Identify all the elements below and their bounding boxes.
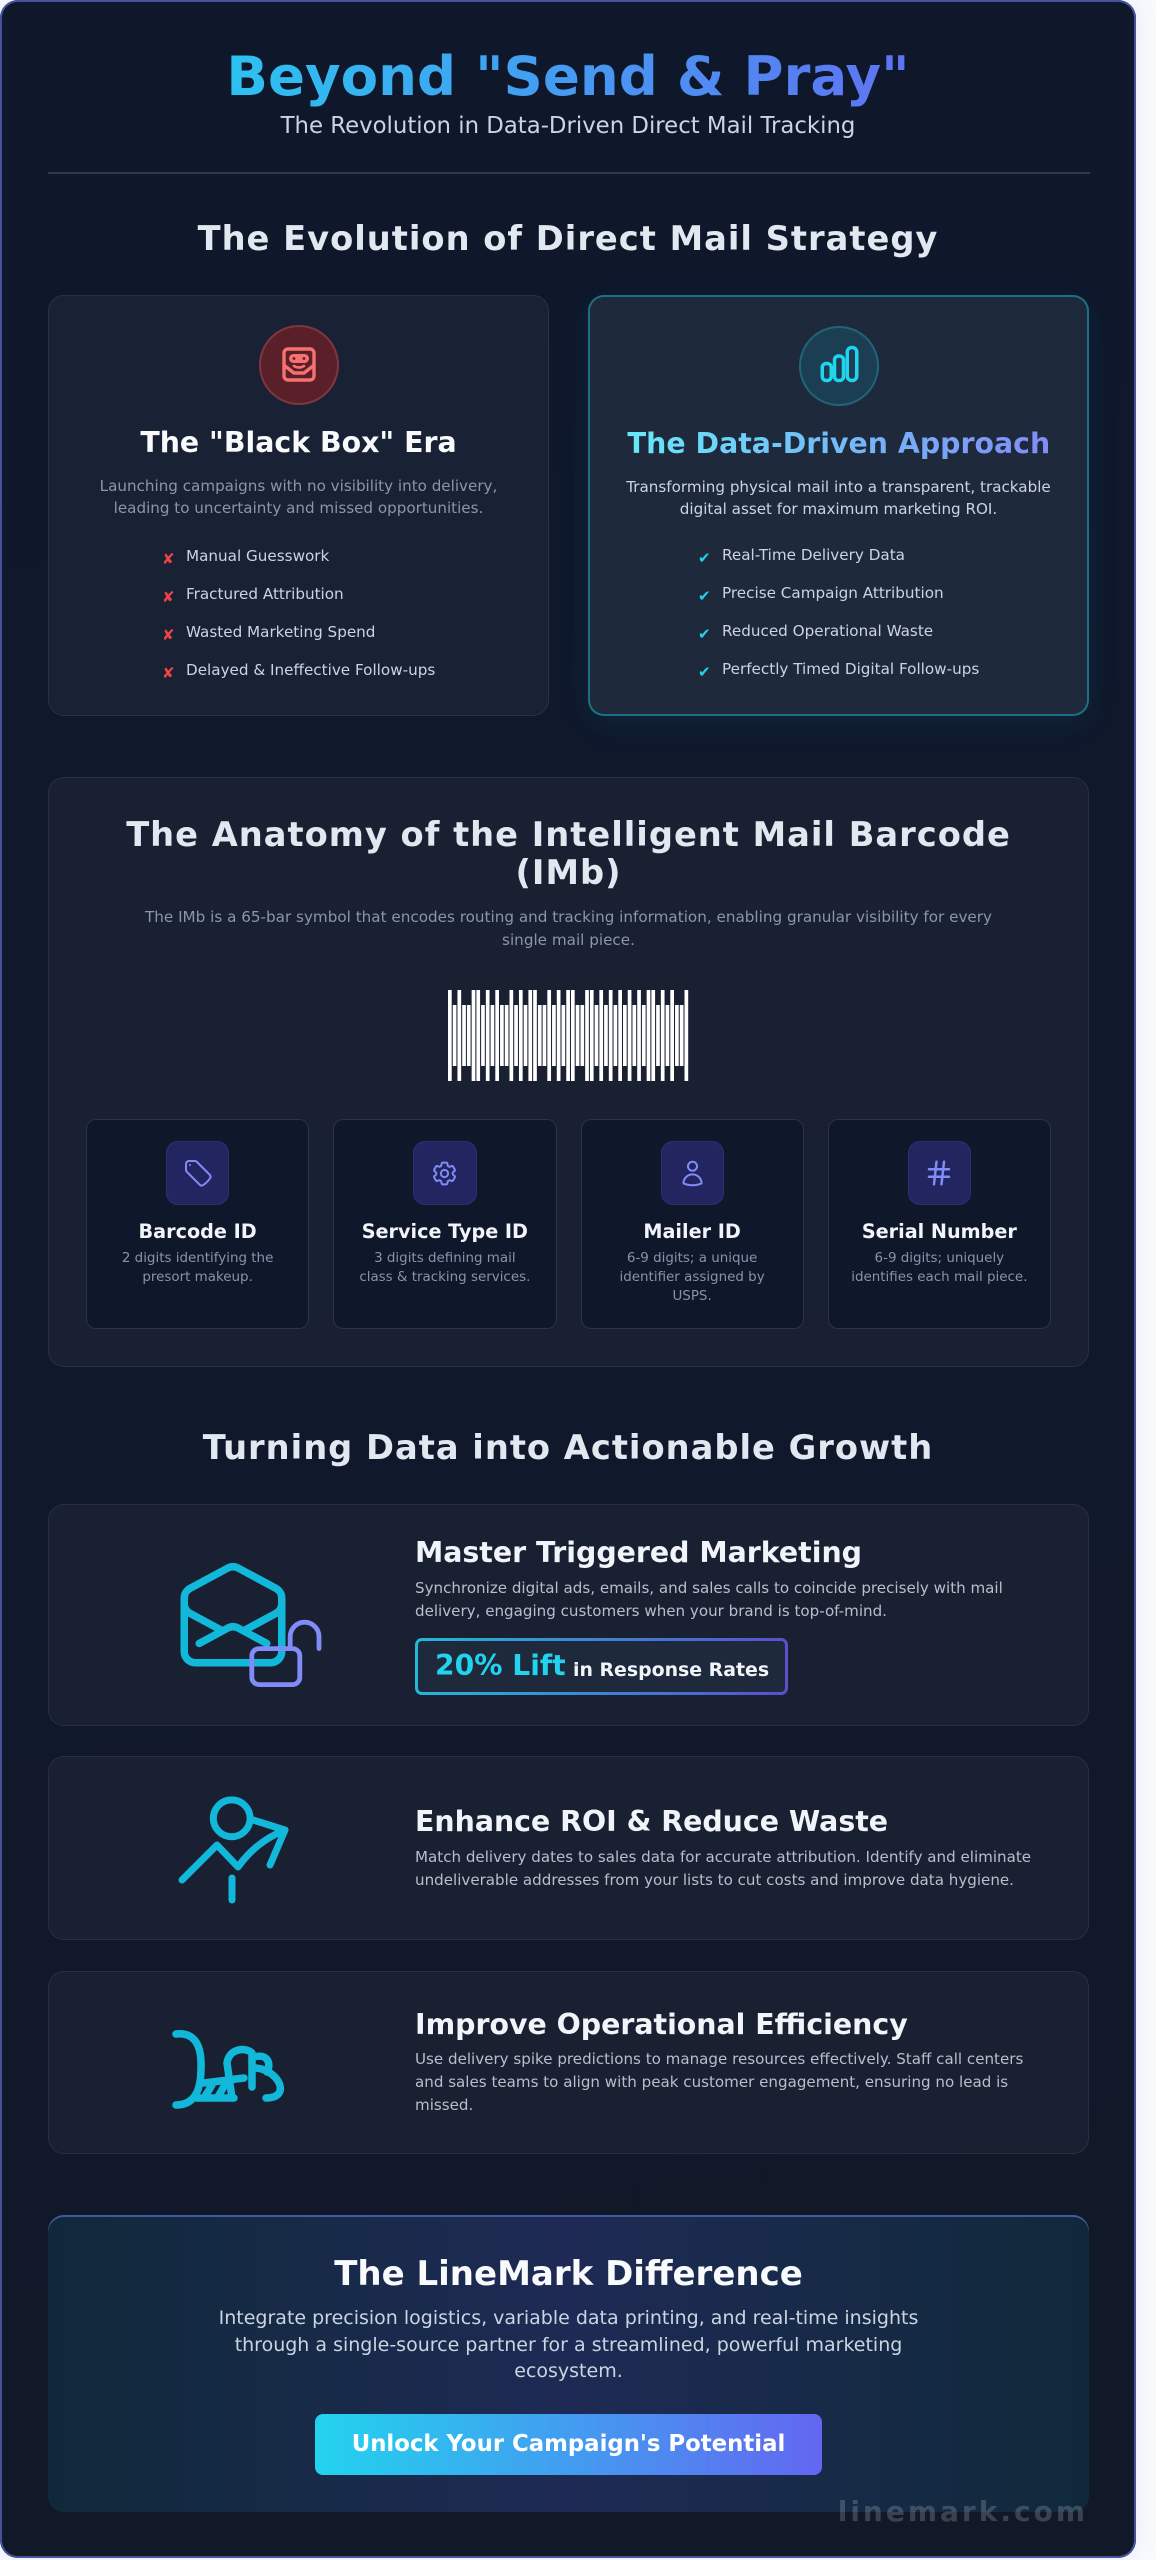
watermark: linemark.com — [838, 2495, 1088, 2528]
feature description: delivery, engaging customers when your brand is top-of-mind. — [415, 1602, 887, 1620]
list: benefits: Reduced Operational Waste — [722, 622, 933, 640]
detail: presort makeup. — [142, 1270, 253, 1285]
card description — [626, 478, 1051, 518]
stat label: in Response Rates — [573, 1659, 769, 1681]
card description: Transforming physical mail into a transparent, trackable — [626, 478, 1051, 496]
list: problems: ✘ — [162, 664, 175, 682]
CTA description: ecosystem. — [514, 2360, 623, 2382]
detail: 3 digits defining mail — [374, 1251, 516, 1266]
list: benefits: ✔ — [698, 625, 711, 643]
card description: digital asset for maximum marketing ROI. — [680, 500, 997, 518]
CTA description: through a single-source partner for a streamlined, powerful marketing — [235, 2334, 902, 2356]
feature heading: Enhance ROI & Reduce Waste — [415, 1805, 888, 1838]
list: problems: Wasted Marketing Spend — [186, 623, 375, 641]
card description: Launching campaigns with no visibility into delivery, — [100, 477, 497, 495]
list: problems: ✘ — [162, 626, 175, 644]
IMb description: single mail piece. — [502, 931, 635, 949]
feature description: missed. — [415, 2096, 473, 2114]
subtitle: The Revolution in Data-Driven Direct Mail Tracking — [281, 113, 855, 139]
heading: IMb: The Anatomy of the Intelligent Mail Barcode — [126, 814, 1011, 854]
feature description: and sales teams to align with peak customer engagement, ensuring no lead is — [415, 2073, 1008, 2091]
component: serial number — [828, 1119, 1051, 1329]
card heading: The "Black Box" Era — [140, 426, 457, 459]
list: problems: ✘ — [162, 588, 175, 606]
panel: ROI and waste — [48, 1756, 1089, 1940]
feature description — [415, 2050, 1023, 2114]
icon: black box — [258, 325, 338, 405]
list: benefits: Real-Time Delivery Data — [722, 546, 905, 564]
list: benefits: ✔ — [698, 663, 711, 681]
panel: operational efficiency — [48, 1971, 1089, 2154]
label: Service Type ID — [362, 1220, 528, 1243]
CTA heading: The LineMark Difference — [334, 2254, 803, 2294]
list: problems: Manual Guesswork — [186, 547, 329, 565]
feature heading: Master Triggered Marketing — [415, 1536, 862, 1569]
detail — [122, 1251, 273, 1285]
title: Beyond "Send & Pray" — [226, 44, 910, 108]
CTA description: Integrate precision logistics, variable data printing, and real-time insights — [219, 2307, 918, 2329]
heading: IMb: (IMb) — [516, 853, 621, 892]
panel: black box era — [48, 295, 549, 716]
list: benefits: ✔ — [698, 549, 711, 567]
list: problems: Fractured Attribution — [186, 585, 344, 603]
detail: 2 digits identifying the — [122, 1251, 273, 1266]
list: problems: Delayed & Ineffective Follow-ups — [186, 661, 435, 679]
feature heading: Improve Operational Efficiency — [415, 2008, 908, 2040]
component: service type id — [333, 1119, 556, 1329]
component: barcode id — [86, 1119, 309, 1329]
label: Serial Number — [862, 1220, 1017, 1243]
icon: open envelope with unlocked padlock — [180, 1562, 322, 1687]
feature description: Match delivery dates to sales data for accurate attribution. Identify and eliminate — [415, 1848, 1031, 1866]
icon: gear — [413, 1141, 476, 1205]
list: problems — [162, 547, 435, 682]
list: benefits: Precise Campaign Attribution — [722, 584, 944, 602]
CTA description — [219, 2307, 918, 2382]
list: benefits: Perfectly Timed Digital Follow-ups — [722, 660, 979, 678]
label: Mailer ID — [643, 1220, 741, 1243]
detail — [851, 1251, 1027, 1285]
header divider — [48, 172, 1090, 174]
detail: 6-9 digits; a unique — [627, 1251, 757, 1266]
feature description: Use delivery spike predictions to manage resources effectively. Staff call centers — [415, 2050, 1023, 2068]
icon: user — [660, 1141, 724, 1205]
list: benefits — [698, 546, 979, 681]
label: Barcode ID — [139, 1220, 257, 1243]
feature description: Synchronize digital ads, emails, and sales calls to coincide precisely with mail — [415, 1579, 1003, 1597]
stat badge — [415, 1638, 788, 1695]
detail: USPS. — [672, 1289, 712, 1304]
CTA button — [315, 2414, 822, 2475]
detail: class & tracking services. — [359, 1270, 530, 1285]
heading: evolution: The Evolution of Direct Mail Strategy — [198, 219, 938, 258]
icon: bar chart — [798, 326, 878, 406]
IMb description: The IMb is a 65-bar symbol that encodes routing and tracking information, enabling granular visibility for every — [145, 908, 992, 926]
icon: resource chart scribble — [172, 2030, 284, 2109]
barcode graphic — [448, 990, 688, 1081]
icon: trending arrow with circle — [178, 1796, 288, 1904]
heading: IMb — [126, 814, 1011, 892]
panel: data-driven approach — [588, 295, 1089, 716]
heading: growth: Turning Data into Actionable Growth — [203, 1428, 933, 1467]
feature description: undeliverable addresses from your lists to cut costs and improve data hygiene. — [415, 1871, 1014, 1889]
panel: IMb anatomy — [48, 777, 1089, 1367]
card description: leading to uncertainty and missed opportunities. — [114, 499, 483, 517]
list: benefits: ✔ — [698, 587, 711, 605]
detail: 6-9 digits; uniquely — [875, 1251, 1004, 1266]
CTA button: Unlock Your Campaign's Potential — [352, 2431, 785, 2457]
list: problems: ✘ — [162, 550, 175, 568]
detail — [620, 1251, 765, 1304]
panel: triggered marketing — [48, 1504, 1089, 1726]
component: mailer id — [580, 1119, 804, 1329]
icon: hashtag — [908, 1141, 971, 1205]
detail: identifier assigned by — [620, 1270, 765, 1285]
IMb description — [144, 908, 992, 949]
stat value: 20% Lift — [435, 1649, 566, 1682]
panel: call to action — [48, 2215, 1089, 2512]
card description — [100, 477, 497, 517]
card heading: The Data-Driven Approach — [627, 427, 1050, 460]
icon: tag — [166, 1141, 229, 1205]
feature description — [415, 1579, 1003, 1620]
detail — [359, 1251, 530, 1285]
feature description — [415, 1848, 1031, 1889]
detail: identifies each mail piece. — [851, 1270, 1027, 1285]
